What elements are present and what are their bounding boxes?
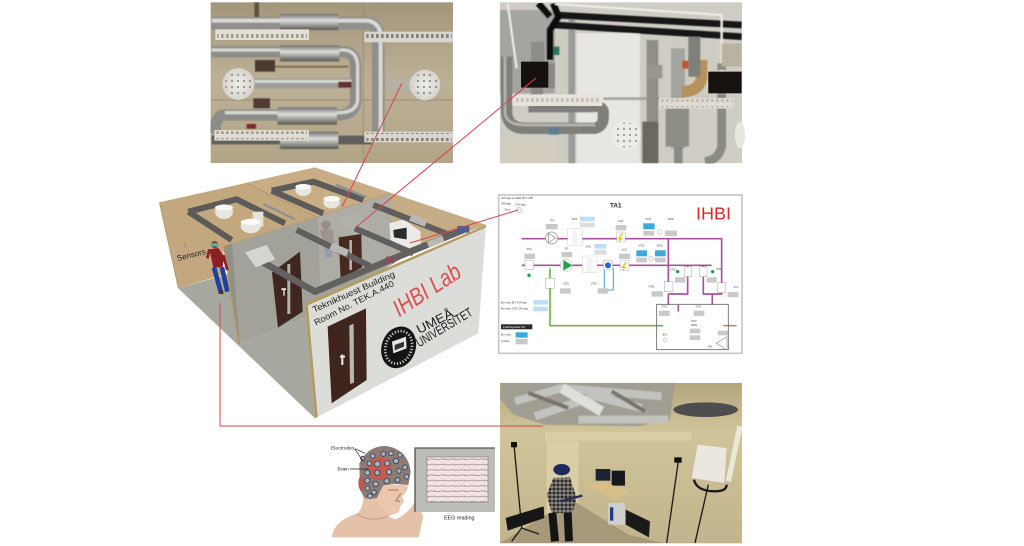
electrode labels: Electrodes <box>331 446 355 452</box>
electrode labels <box>331 446 368 473</box>
EEG caption: EEG reading <box>444 515 475 521</box>
person with VR headset <box>553 464 570 475</box>
schematic title: TA1 <box>610 202 622 209</box>
component labels: ST4 <box>734 287 739 289</box>
heaters and tripods <box>506 506 544 531</box>
corridor ducts <box>245 205 469 292</box>
panel: ventilation control schematic <box>499 195 742 353</box>
university name: UNIVERSITET <box>414 305 475 350</box>
component labels: ST09 <box>716 269 722 271</box>
schematic controls: Timer <box>504 209 510 212</box>
front wall <box>305 225 486 418</box>
air flow pipes <box>522 239 737 326</box>
component labels: ST05 <box>591 284 597 286</box>
university logo <box>375 321 422 373</box>
component labels: LV03 <box>618 221 624 223</box>
component labels: BK1 <box>663 335 668 337</box>
component labels: SM02 <box>691 325 698 327</box>
component labels: TF4 <box>550 220 555 222</box>
schematic controls: CKN läge <box>516 204 526 206</box>
photo: lab room interior <box>500 383 742 543</box>
component labels: SF03 <box>572 219 578 221</box>
EEG illustration <box>331 446 495 537</box>
room floor <box>178 273 315 418</box>
component labels: SF01 <box>586 246 592 248</box>
component labels: BF1 <box>708 347 713 349</box>
component labels: ST07 <box>691 321 697 323</box>
EEG monitor <box>415 448 495 512</box>
head and shoulders <box>332 485 423 537</box>
component labels: ST00 <box>646 219 652 221</box>
component labels: ST03 <box>638 246 645 248</box>
ceiling and rear walls <box>159 167 487 288</box>
wall unit <box>692 445 727 483</box>
building name sign: Room No. TEK.A.440 <box>312 278 396 327</box>
photo: ceiling ducts viewed from below <box>211 2 453 163</box>
building name sign: Teknikhuest Building <box>311 269 397 314</box>
front door <box>328 308 367 403</box>
component labels <box>501 219 739 349</box>
scalp with electrodes <box>358 446 411 498</box>
value readouts <box>524 217 738 340</box>
electrode labels: Brain <box>337 467 349 473</box>
interior doors <box>272 234 362 328</box>
building model <box>159 167 487 418</box>
component labels: Bör-värde ST01 CKN-läge <box>501 308 529 311</box>
lab title: IHBI Lab <box>388 258 466 322</box>
component labels: SF1 <box>564 248 569 250</box>
component labels: ST02 <box>662 307 668 309</box>
wall control unit <box>389 219 421 250</box>
university name: UMEÅ <box>414 305 456 337</box>
schematic controls: CKN läge är inställt TF1 / UHB <box>501 197 533 200</box>
upper ducts with diffusers <box>188 182 367 240</box>
component labels: Ärvärde <box>501 340 510 343</box>
IHBI label: IHBI <box>696 203 731 223</box>
legend: Inställningsvärde TA1 <box>503 326 526 329</box>
component labels: ST08 <box>648 286 655 288</box>
schematic controls: CKN läge <box>501 204 512 206</box>
desk and monitors <box>596 469 610 481</box>
component labels: Bör-värde <box>501 333 512 336</box>
indoor unit box <box>657 304 728 350</box>
component labels: ST01 <box>526 249 533 251</box>
component labels: ST06 <box>670 269 676 271</box>
connector lines <box>220 78 543 426</box>
component labels: Bör-värde BF1 CKN-läge <box>501 301 528 304</box>
person with headset <box>207 241 227 294</box>
legend <box>501 324 532 344</box>
ceiling ducts <box>500 383 675 426</box>
component labels: ST05 <box>696 307 702 309</box>
component labels: SM01 <box>657 246 663 248</box>
sensors label: Sensors <box>176 247 207 263</box>
schematic controls <box>501 197 533 213</box>
component labels: LV01 <box>622 250 628 252</box>
corridor far wall <box>224 193 420 344</box>
component labels: ST02 <box>563 284 570 286</box>
component labels: SM00 <box>668 219 674 221</box>
university name <box>414 305 475 350</box>
fans and components <box>525 229 726 293</box>
ghosted person behind partition <box>320 220 334 257</box>
photo: duct installation on wall <box>500 2 745 163</box>
